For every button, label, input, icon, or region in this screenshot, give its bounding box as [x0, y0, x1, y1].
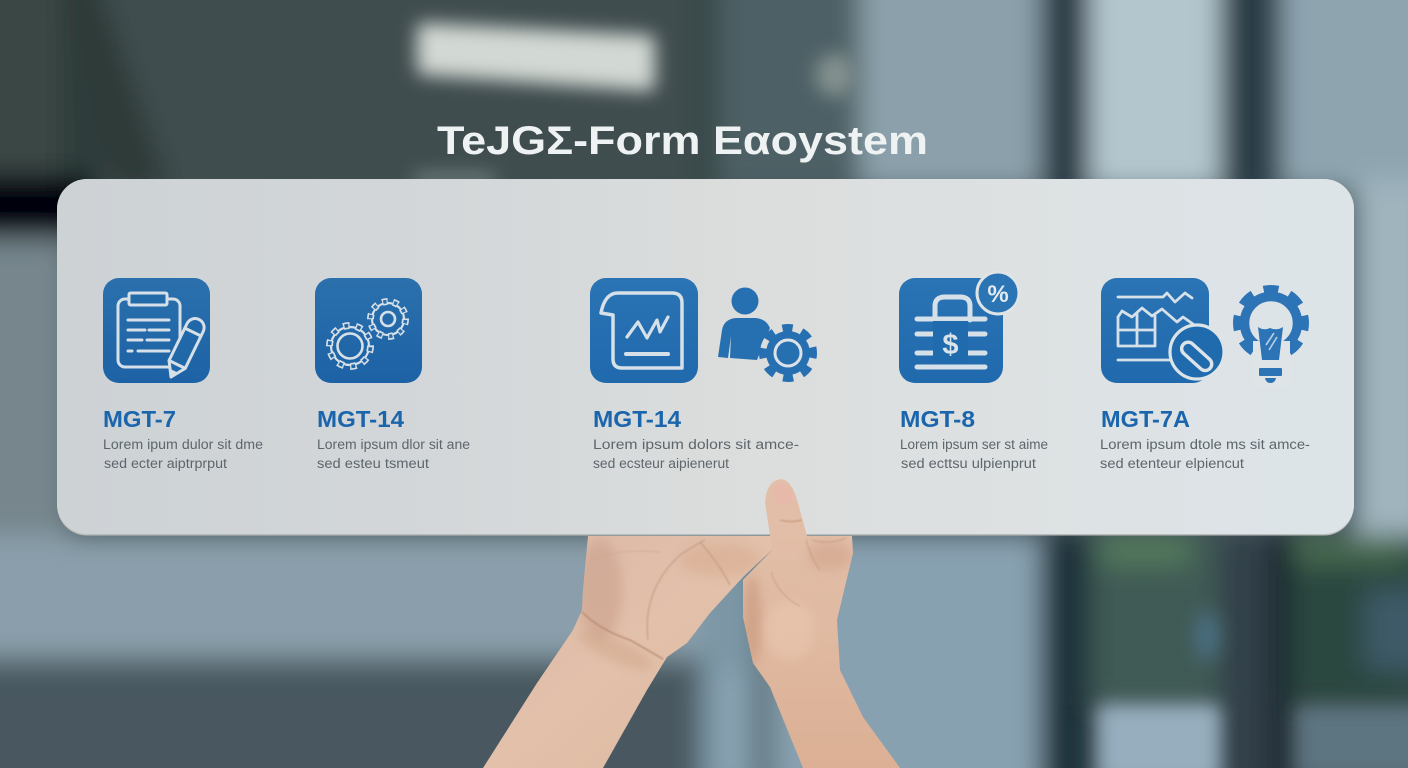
label: MGT-8: MGT-8	[900, 406, 975, 432]
description: MGT-14: sed ecsteur aipienerut	[593, 456, 729, 471]
title: TeJGΣ-Form Eαoystem	[437, 119, 928, 163]
item: MGT-14 report	[590, 278, 816, 471]
icon: locked dollar with percent badge: %	[987, 281, 1009, 308]
icon: clipboard and pencil	[103, 278, 210, 383]
label: MGT-14: MGT-14	[593, 406, 681, 432]
description: MGT-7: Lorem ipum dulor sit dme	[103, 437, 263, 452]
description: MGT-8: sed ecttsu ulpienprut	[901, 456, 1036, 471]
description: MGT-8: Lorem ipsum ser st aime	[900, 437, 1048, 452]
label: MGT-7: MGT-7	[103, 406, 176, 432]
description: MGT-7A: Lorem ipsum dtole ms sit amce-	[1100, 437, 1310, 452]
description: MGT-14	[593, 437, 799, 471]
left hand and forearm	[483, 536, 772, 768]
icon: locked dollar with percent badge	[899, 272, 1019, 383]
description: MGT-7A: sed etenteur elpiencut	[1100, 456, 1244, 471]
icon: locked dollar with percent badge: $	[942, 329, 959, 361]
icon: gear with light bulb	[1237, 289, 1305, 387]
item: MGT-8	[899, 272, 1048, 471]
icon: document with chart	[590, 278, 698, 383]
label: MGT-14: MGT-14	[317, 406, 404, 432]
item: MGT-7	[103, 278, 263, 471]
description: MGT-7A	[1100, 437, 1310, 471]
description: MGT-14: sed esteu tsmeut	[317, 456, 429, 471]
icon: two gears	[315, 278, 422, 383]
icon: chart table with paperclip	[1101, 278, 1224, 383]
hands holding the board	[483, 479, 900, 768]
description: MGT-14	[317, 437, 470, 471]
description: MGT-7	[103, 437, 263, 471]
description: MGT-7: sed ecter aiptrprput	[104, 456, 227, 471]
description: MGT-8	[900, 437, 1048, 471]
label: MGT-7A: MGT-7A	[1101, 406, 1190, 432]
panel: main board	[57, 179, 1354, 536]
right hand and thumb	[743, 479, 900, 768]
item: MGT-14 gears	[315, 278, 470, 471]
item: MGT-7A	[1100, 278, 1310, 471]
icon: person with gear	[718, 288, 816, 381]
description: MGT-14: Lorem ipsum dlor sit ane	[317, 437, 470, 452]
description: MGT-14: Lorem ipsum dolors sit amce-	[593, 437, 799, 452]
